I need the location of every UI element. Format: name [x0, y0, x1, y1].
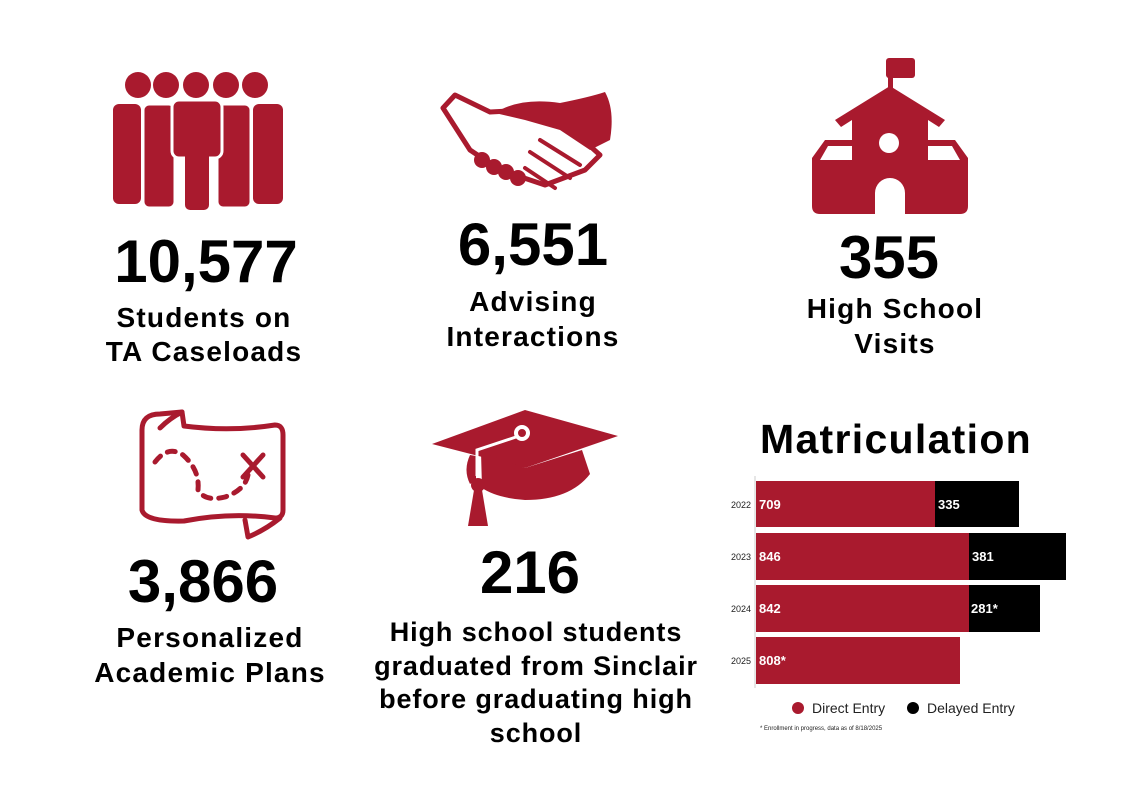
stat: students: 10,577	[114, 228, 298, 295]
stat: academic plans: Personalized	[116, 622, 304, 653]
bar chart: matriculation: 846	[759, 549, 781, 564]
footnote: * Enrollment in progress, data as of 8/18/2025	[760, 726, 883, 732]
stat: academic plans	[94, 548, 326, 688]
icon: handshake	[443, 92, 612, 188]
bar chart: matriculation: 2025	[731, 656, 751, 666]
bar chart: matriculation: 335	[938, 497, 960, 512]
stat: academic plans: 3,866	[128, 548, 278, 615]
icon: school house	[812, 58, 968, 214]
stat: advising: Advising	[469, 286, 597, 317]
bar chart: matriculation: 281*	[971, 601, 999, 616]
stat: high school visits	[807, 224, 983, 359]
icon: graduation cap	[432, 410, 618, 526]
bar chart: matriculation: 381	[972, 549, 994, 564]
bar chart: matriculation: 842	[759, 601, 781, 616]
stat: students	[106, 228, 302, 367]
bar chart: matriculation: 2024	[731, 604, 751, 614]
stat: high school graduates: 216	[480, 539, 580, 606]
heading: Matriculation: Matriculation	[760, 416, 1032, 462]
icon: treasure map	[142, 412, 283, 537]
bar chart: matriculation: 709	[759, 497, 781, 512]
stat: high school graduates: High school students	[390, 617, 682, 647]
stat: students: TA Caseloads	[106, 336, 302, 367]
stat: students: Students on	[117, 302, 291, 333]
bar chart: matriculation	[731, 476, 1066, 688]
stat: academic plans: Academic Plans	[94, 657, 326, 688]
icon: people group	[113, 72, 283, 210]
stat: high school graduates: before graduating high	[379, 684, 693, 714]
legend: Direct Entry	[812, 700, 885, 716]
bar chart: matriculation: 2023	[731, 552, 751, 562]
stat: high school graduates	[374, 539, 698, 748]
stat: high school visits: High School	[807, 293, 983, 324]
legend	[792, 700, 1015, 716]
stat: high school graduates: school	[490, 718, 582, 748]
stat: advising: Interactions	[446, 321, 620, 352]
bar chart: matriculation: 808*	[759, 653, 787, 668]
stat: high school visits: Visits	[854, 328, 936, 359]
stat: high school graduates: graduated from Sinclair	[374, 651, 698, 681]
legend: Delayed Entry	[927, 700, 1015, 716]
stat: advising	[446, 211, 620, 352]
bar chart: matriculation: 2022	[731, 500, 751, 510]
stat: high school visits: 355	[839, 224, 939, 291]
stat: advising: 6,551	[458, 211, 608, 278]
